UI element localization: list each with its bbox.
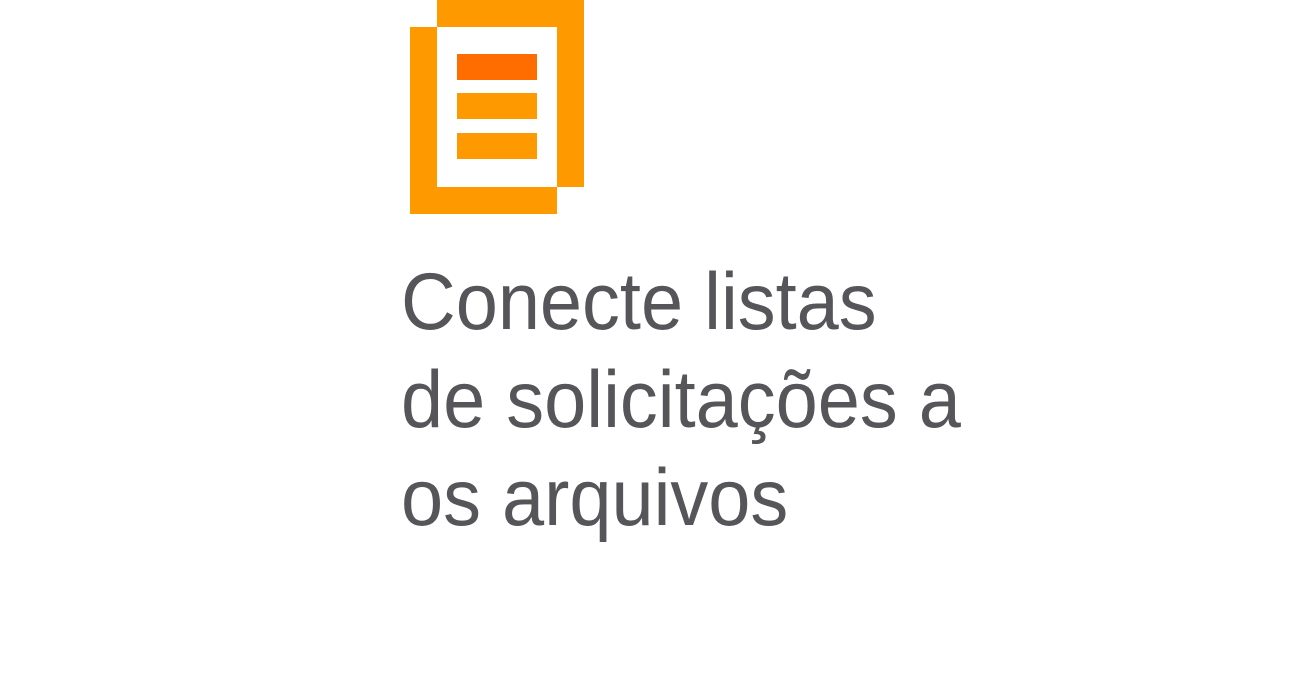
heading text: Conecte listas [401,257,877,347]
heading text: os arquivos [401,453,788,543]
heading text [401,257,961,543]
heading text: de solicitações a [401,355,961,445]
